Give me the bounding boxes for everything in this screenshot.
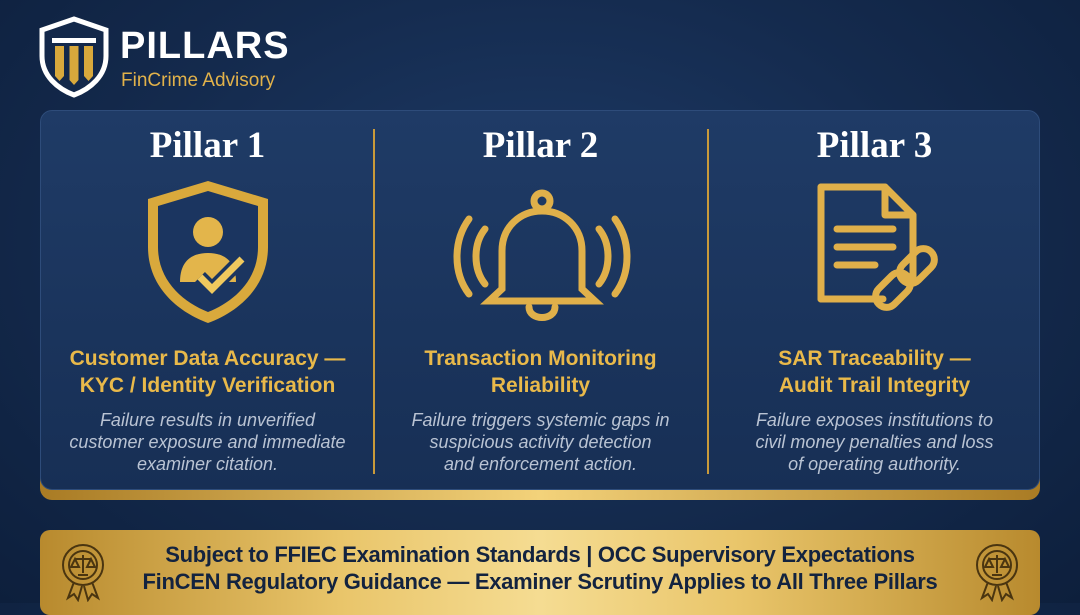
subtitle — [778, 347, 971, 397]
subtitle: Transaction Monitoring — [424, 347, 657, 370]
banner: regulatory standards — [40, 530, 1040, 615]
banner text: Subject to FFIEC Examination Standards | OCC Supervisory Expectations — [165, 542, 915, 567]
icon: shield with user check — [148, 181, 268, 323]
icon: shield with pillars — [40, 16, 108, 98]
panel: three pillars — [40, 110, 1040, 490]
subtitle: SAR Traceability — — [778, 347, 971, 370]
description: Failure triggers systemic gaps in — [411, 410, 670, 430]
icon: seal left — [62, 544, 104, 602]
subtitle — [424, 347, 657, 397]
subtitle: Audit Trail Integrity — [779, 374, 970, 397]
pillar 3 — [755, 125, 994, 474]
description: customer exposure and immediate — [69, 432, 346, 452]
subtitle: Customer Data Accuracy — — [70, 347, 345, 370]
description: Failure exposes institutions to — [756, 410, 993, 430]
icon: seal right — [976, 544, 1018, 602]
heading: Pillar 1 — [150, 125, 265, 166]
heading: Pillar 2 — [483, 125, 598, 166]
description: suspicious activity detection — [429, 432, 652, 452]
description — [411, 410, 670, 474]
pillar 1 — [69, 125, 346, 474]
description: civil money penalties and loss — [755, 432, 994, 452]
brand name: PILLARS — [120, 25, 290, 67]
pillar 2 — [411, 125, 670, 474]
tagline: FinCrime Advisory — [121, 70, 275, 91]
gold base of panel — [40, 120, 1040, 500]
description: of operating authority. — [788, 454, 961, 474]
banner text — [143, 542, 937, 594]
description: examiner citation. — [137, 454, 278, 474]
description — [755, 410, 994, 474]
subtitle — [70, 347, 346, 397]
logo — [40, 16, 290, 98]
icon: document with chain link — [818, 184, 938, 311]
description — [69, 410, 346, 474]
subtitle: Reliability — [491, 374, 590, 397]
icon: ringing bell — [454, 190, 630, 321]
description: and enforcement action. — [444, 454, 637, 474]
subtitle: KYC / Identity Verification — [80, 374, 335, 397]
heading: Pillar 3 — [817, 125, 932, 166]
description: Failure results in unverified — [100, 410, 315, 430]
banner text: FinCEN Regulatory Guidance — Examiner Scrutiny Applies to All Three Pillars — [143, 569, 937, 594]
